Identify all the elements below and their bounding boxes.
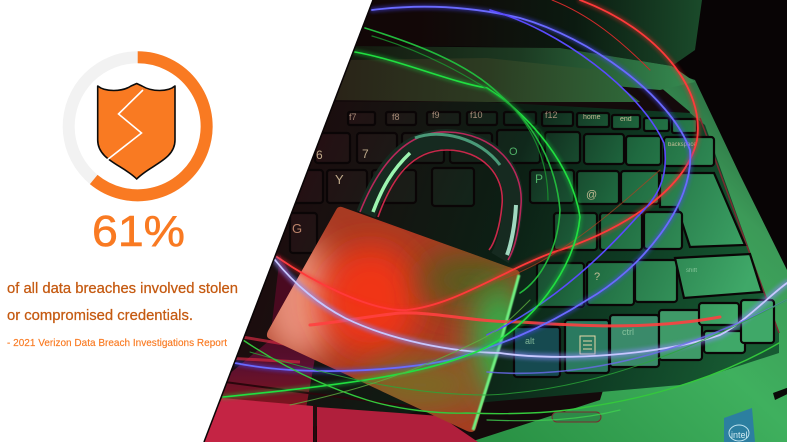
key labels: 6 [316,148,323,162]
key labels: O [509,146,518,158]
key labels: @ [586,189,597,201]
key labels: f8 [392,112,400,122]
key labels: G [292,221,302,236]
description text: or compromised credentials. [7,308,193,324]
padlock shackle [360,132,521,260]
donut chart: 61% [69,57,207,195]
lower letter key row [537,254,762,307]
enter key [660,173,745,247]
icon: cracked shield [98,84,175,179]
function key row [348,112,697,133]
key labels [292,110,697,346]
key labels: home [583,114,601,121]
home letter key row [290,212,682,253]
padlock body [267,207,520,432]
red trails [277,0,720,326]
blue trails [235,7,787,373]
description text [7,281,238,324]
key labels: f9 [432,110,440,120]
statistic: 61%: 61% [92,207,185,256]
keyboard deck [307,102,779,426]
padlock reflections [260,240,528,411]
speaker grill [332,58,640,102]
photo: padlock on laptop keyboard with light trails [200,0,787,442]
laptop screen [352,0,702,66]
laptop slot and button [552,388,787,422]
number key row [315,130,714,166]
photo diagonal edge [204,0,373,442]
intel sticker [724,408,755,442]
laptop body [475,78,787,442]
description text: of all data breaches involved stolen [7,281,238,297]
key labels: alt [525,336,535,346]
upper letter key row [285,168,659,206]
key labels: end [620,116,632,123]
deck red edge [700,118,779,333]
key labels: f7 [349,112,357,122]
key labels: 7 [362,147,369,161]
padlock highlights [473,275,519,430]
bottom key row [514,300,774,377]
key labels: f12 [545,110,558,120]
left dark deck [313,86,690,442]
light trails [223,0,787,421]
key labels: P [535,172,543,186]
source citation: - 2021 Verizon Data Breach Investigations Report [7,337,227,349]
key labels: f10 [470,110,483,120]
key labels: ? [594,271,600,283]
green trails [223,28,787,421]
key labels: backspace [668,142,697,148]
intel sticker: intel [731,430,748,440]
key labels: ctrl [622,327,634,337]
hinge band [345,46,695,90]
padlock [260,132,528,432]
lower left red area [204,255,480,442]
key labels: Y [335,172,344,187]
key labels: shift [686,268,697,274]
icon: menu key [580,336,595,354]
